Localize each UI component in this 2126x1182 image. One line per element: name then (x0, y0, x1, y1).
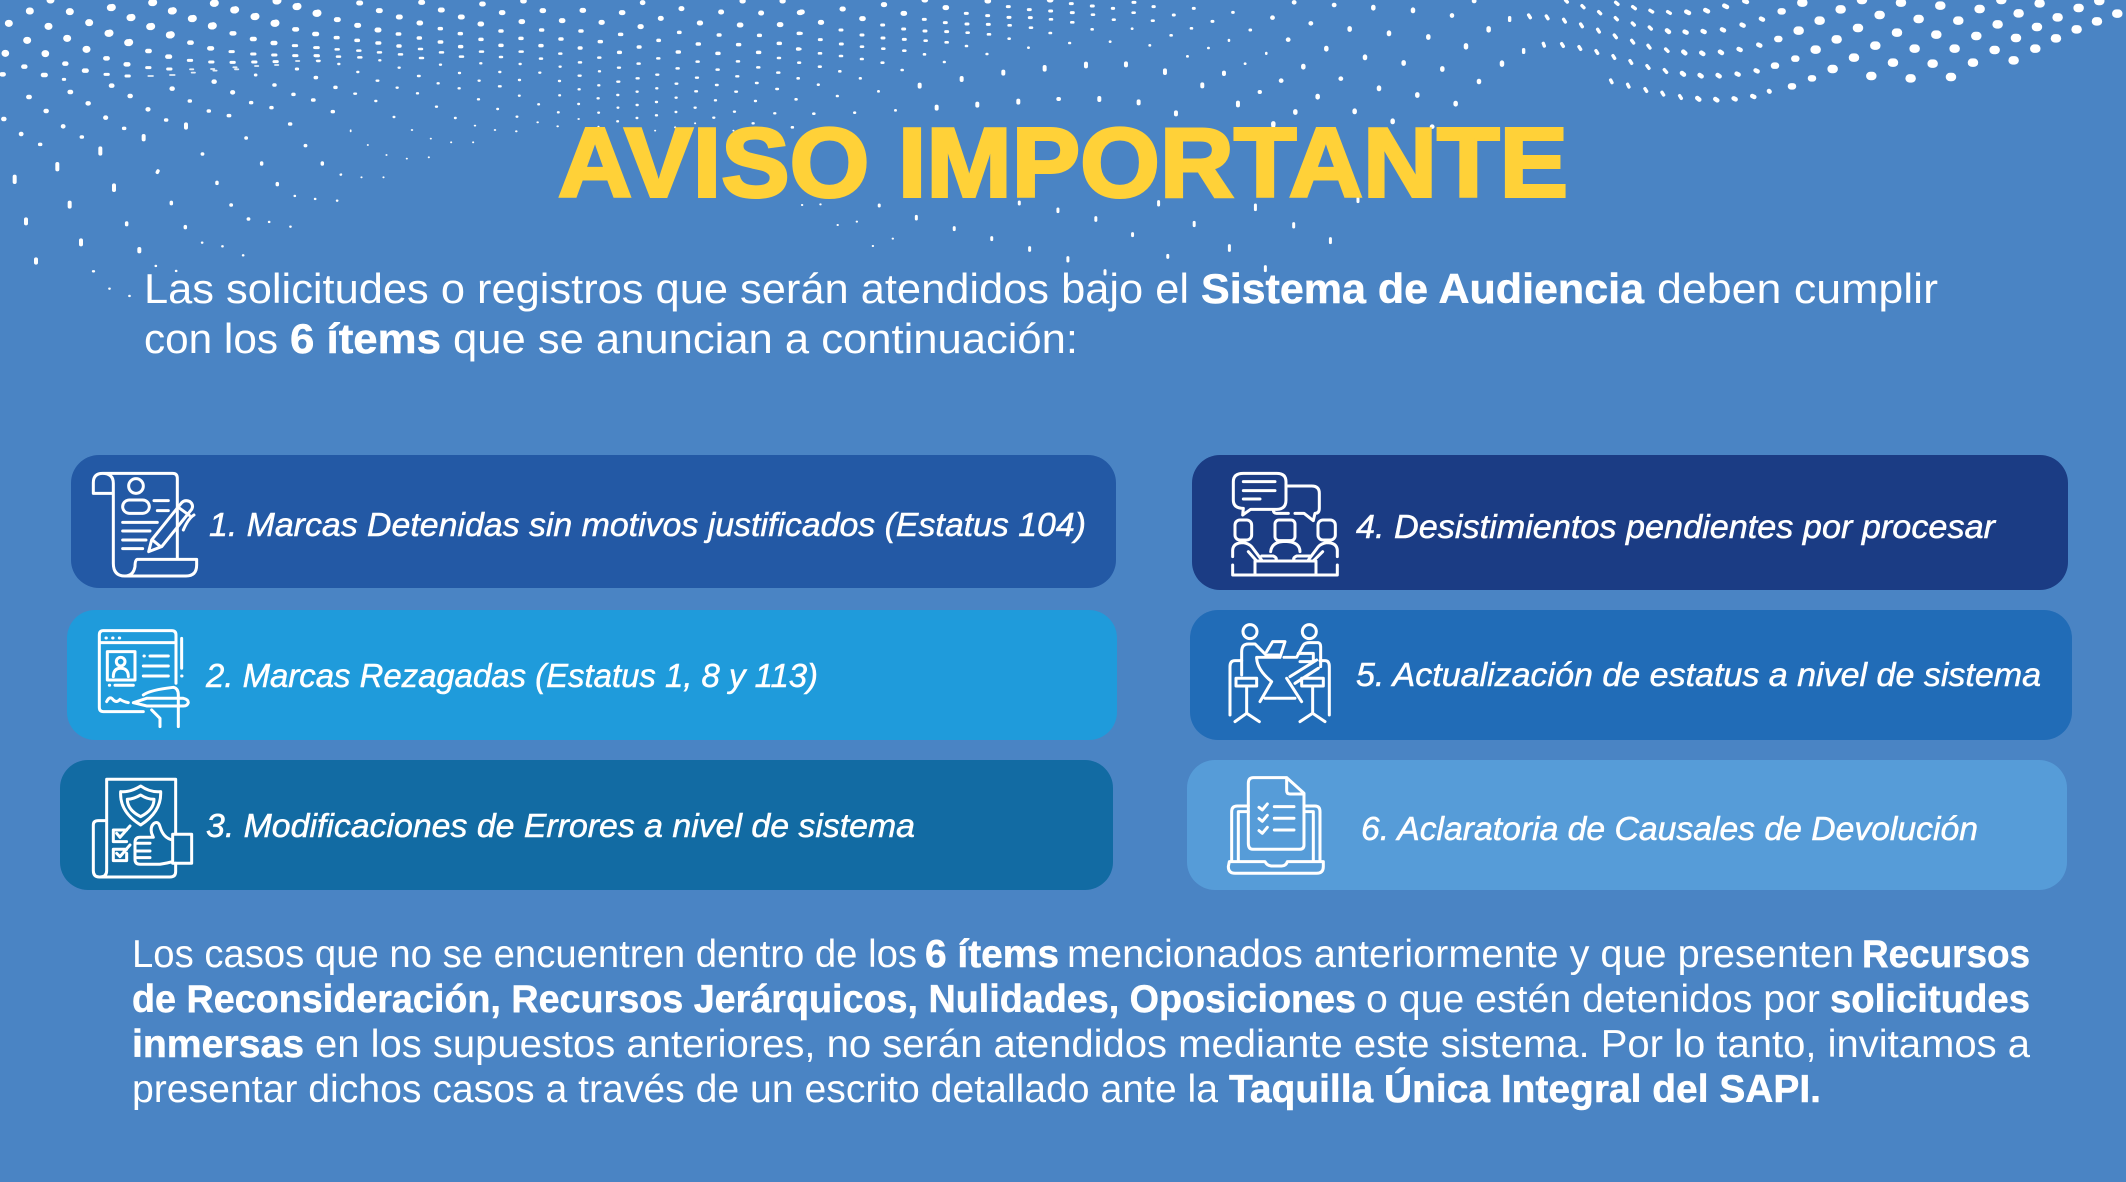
closing paragraph (132, 933, 2030, 1111)
closing paragraph: mencionados anteriormente y que presenten (1067, 933, 1854, 976)
text item 1: 1. Marcas Detenidas sin motivos justificados (Estatus 104) (209, 506, 1086, 543)
closing paragraph: Recursos (1862, 933, 2030, 976)
panel 5 (1190, 610, 2072, 740)
dot pattern: upper centre left (306, 1, 801, 177)
closing paragraph: Los casos que no se encuentren dentro de los (132, 933, 917, 976)
panel 3 (60, 760, 1113, 890)
dot pattern: around title (802, 198, 1358, 274)
text item 5: 5. Actualización de estatus a nivel de sistema (1356, 656, 2041, 693)
icon: meeting with speech bubbles (1233, 473, 1337, 575)
panel 2 (67, 610, 1117, 740)
text item 6: 6. Aclaratoria de Causales de Devolución (1361, 810, 1978, 847)
closing paragraph: de Reconsideración, Recursos Jerárquicos, Nulidades, Oposiciones (132, 978, 1356, 1021)
closing paragraph: en los supuestos anteriores, no serán atendidos mediante este sistema. Por lo tanto, invitamos a (315, 1023, 2030, 1066)
icon: scroll and pen (93, 473, 197, 576)
dot pattern: left side (3, 78, 341, 296)
intro text: Sistema de Audiencia (1201, 265, 1645, 312)
intro text: con los (144, 315, 278, 362)
intro text: 6 ítems (290, 315, 441, 362)
icon: web form and signature (99, 631, 188, 727)
dot pattern: upper centre (792, 0, 1273, 127)
closing paragraph: Taquilla Única Integral del SAPI. (1229, 1067, 1821, 1111)
closing paragraph: presentar dichos casos a través de un escrito detallado ante la (132, 1068, 1218, 1111)
panel 4 (1192, 455, 2068, 590)
intro text: deben cumplir (1657, 265, 1938, 312)
text item 2: 2. Marcas Rezagadas (Estatus 1, 8 y 113) (205, 657, 818, 694)
text item 4: 4. Desistimientos pendientes por procesar (1356, 508, 1997, 545)
panel 1 (71, 455, 1116, 588)
dot pattern: top right large dots (1774, 0, 2118, 86)
dot pattern: far top left (2, 0, 320, 79)
closing paragraph: 6 ítems (925, 933, 1059, 976)
intro text: Las solicitudes o registros que serán atendidos bajo el (144, 265, 1189, 312)
intro text: que se anuncian a continuación: (453, 315, 1078, 362)
icon: shield checklist and thumb (93, 779, 192, 877)
intro text (144, 265, 1938, 362)
dot pattern: upper right transition (1272, 0, 1770, 127)
panel 6 (1187, 760, 2067, 890)
closing paragraph: o que estén detenidos por (1366, 978, 1820, 1021)
text item 3: 3. Modificaciones de Errores a nivel de sistema (206, 807, 915, 844)
icon: document on laptop (1228, 778, 1323, 873)
closing paragraph: inmersas (132, 1023, 304, 1066)
title: AVISO IMPORTANTE (558, 108, 1568, 218)
icon: two people at a desk (1230, 625, 1329, 722)
closing paragraph: solicitudes (1830, 978, 2030, 1021)
